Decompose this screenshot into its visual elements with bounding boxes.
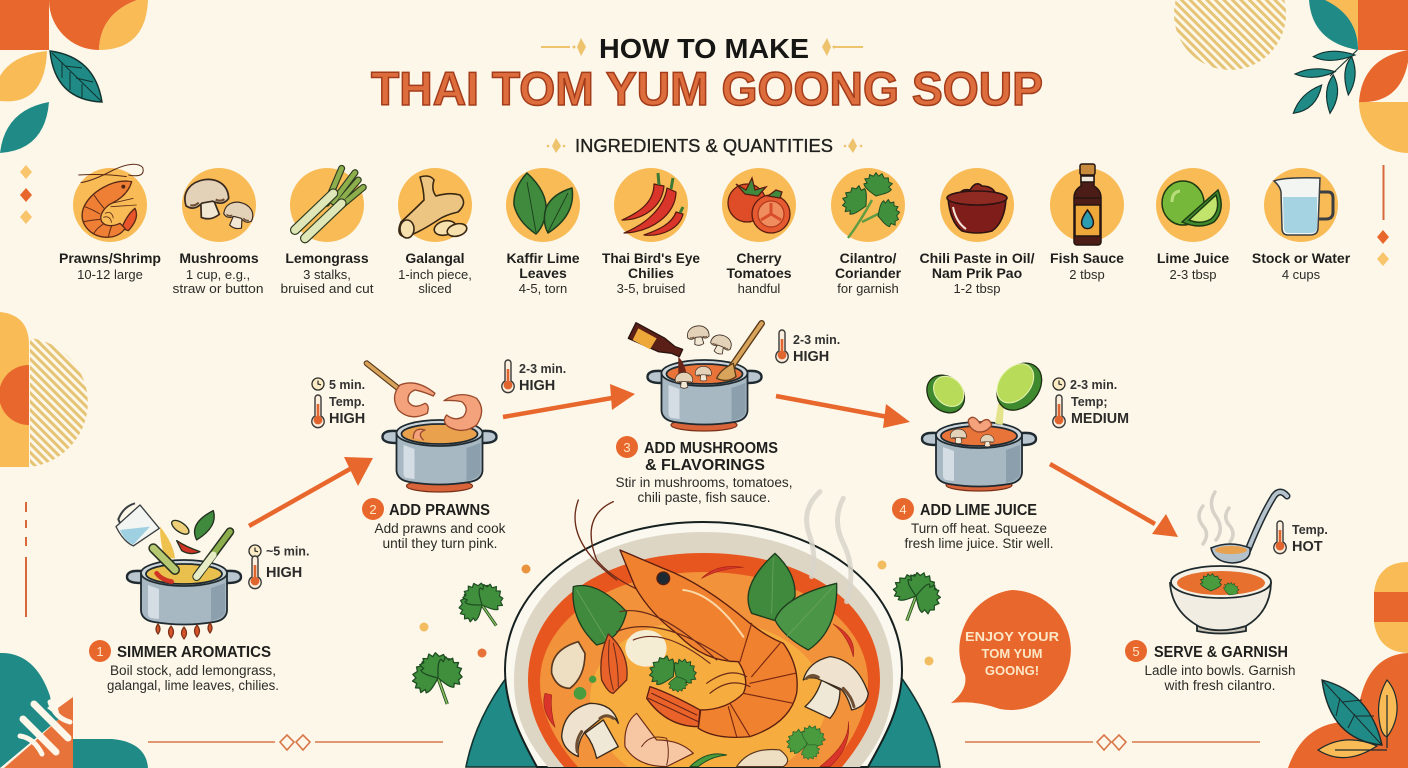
cilantro icon xyxy=(838,171,903,238)
ingredient labels: 1-inch piece, xyxy=(398,267,472,282)
fish ball xyxy=(625,630,667,667)
bottle icon xyxy=(1074,164,1101,245)
bottom mushroom slice xyxy=(737,749,788,767)
step 3 illustration xyxy=(628,323,762,431)
step 3 badge and title xyxy=(616,436,778,474)
step 5 temperature: HOT xyxy=(1292,539,1323,555)
section heading: ingredients: INGREDIENTS & QUANTITIES xyxy=(575,136,833,156)
decoration: bottom-left shapes xyxy=(0,653,148,768)
title ornament left xyxy=(541,38,586,56)
step 2 time and temperature: Temp. xyxy=(329,395,365,409)
chili pieces xyxy=(544,566,854,767)
ingredient labels: 2-3 tbsp xyxy=(1170,267,1216,282)
step 4 badge and title: 4 xyxy=(899,502,907,517)
step 4 description: fresh lime juice. Stir well. xyxy=(904,536,1054,551)
soup toppings, in zoomed coordinates xyxy=(544,492,868,767)
ingredient labels: Chili Paste in Oil/ xyxy=(920,250,1035,266)
step 2 badge and title xyxy=(362,498,490,520)
bottom divider right xyxy=(965,735,1260,750)
step 1 description: Boil stock, add lemongrass, xyxy=(110,663,276,678)
soup xyxy=(528,553,880,767)
scattered cilantro and dots xyxy=(403,560,951,712)
ingredient labels: Tomatoes xyxy=(726,265,792,281)
ingredient: lemongrass xyxy=(290,168,364,242)
ingredient: cilantro xyxy=(831,168,905,242)
bottom divider left xyxy=(148,735,443,750)
step 2 illustration xyxy=(367,363,496,492)
shrimp icon xyxy=(78,164,143,237)
ingredient labels: straw or button xyxy=(172,281,264,296)
step 3 time and temperature: HIGH xyxy=(793,349,829,365)
step 3 badge and title: & FLAVORINGS xyxy=(645,457,765,474)
arrow 1 xyxy=(249,457,373,526)
leaf right two xyxy=(775,583,837,650)
step 3 time and temperature xyxy=(776,330,840,365)
ingredient labels: bruised and cut xyxy=(280,281,374,296)
title ornament right xyxy=(822,38,863,56)
garnish xyxy=(1200,574,1241,598)
chili icons xyxy=(622,173,683,235)
pot 1 contents xyxy=(153,532,230,582)
ingredient labels: Kaffir Lime xyxy=(506,250,580,266)
ingredient: galangal xyxy=(398,168,472,242)
ingredient: fish sauce xyxy=(1050,164,1124,245)
tomato icons xyxy=(728,178,790,233)
mushroom side xyxy=(552,642,585,688)
step 4 time and temperature: 2-3 min. xyxy=(1070,378,1117,392)
plate under bowl xyxy=(466,660,940,767)
step 2 time and temperature: HIGH xyxy=(329,411,365,427)
step 5 description: with fresh cilantro. xyxy=(1163,678,1276,693)
bowl xyxy=(505,522,902,767)
step 3 time and temperature: 2-3 min. xyxy=(793,333,840,347)
step 2 time and temperature xyxy=(312,378,365,428)
arrow 4 xyxy=(1050,464,1178,537)
ingredient labels: Fish Sauce xyxy=(1050,250,1124,266)
ingredient labels: Lemongrass xyxy=(285,250,369,266)
step 1 illustration xyxy=(116,503,241,639)
step 1 description: galangal, lime leaves, chilies. xyxy=(107,678,279,693)
ingredient: kaffir lime leaves xyxy=(506,168,580,242)
ingredient labels: Stock or Water xyxy=(1252,250,1351,266)
cilantro lower right xyxy=(784,722,829,763)
step 1 badge and title: SIMMER AROMATICS xyxy=(117,644,271,661)
serving bowl xyxy=(1170,566,1271,634)
step 3 lead-in timing: 2-3 min. xyxy=(519,362,566,376)
step 1 description xyxy=(107,663,279,693)
step 5 badge and title: SERVE & GARNISH xyxy=(1154,644,1288,661)
ingredient: cherry tomatoes xyxy=(722,168,796,242)
paste bowl icon xyxy=(947,184,1007,233)
steam wisps xyxy=(807,492,851,602)
soup inner xyxy=(540,572,868,767)
pitcher icon xyxy=(1274,178,1333,235)
step 5 description: Ladle into bowls. Garnish xyxy=(1144,663,1296,678)
ingredient labels: Leaves xyxy=(519,265,567,281)
step 4 description xyxy=(904,521,1054,551)
ingredient labels: 10-12 large xyxy=(77,267,143,282)
ingredient labels: 1 cup, e.g., xyxy=(186,267,250,282)
steam xyxy=(1199,492,1233,544)
step 3 description: Stir in mushrooms, tomatoes, xyxy=(616,475,792,490)
bowl inner rim xyxy=(514,532,893,767)
decoration: top-right shapes xyxy=(1174,0,1408,153)
mushroom icons xyxy=(182,176,256,232)
tail fan left xyxy=(601,634,627,693)
speech bubble: GOONG! xyxy=(985,663,1039,678)
title line two: THAI TOM YUM GOONG SOUP xyxy=(371,62,1043,115)
leaf right one xyxy=(748,553,795,622)
step 5 temperature: Temp. xyxy=(1292,523,1328,537)
step 2 description: Add prawns and cook xyxy=(374,521,506,536)
bottle, mushrooms and spoon xyxy=(628,323,762,388)
second prawn xyxy=(625,713,693,767)
decoration: right rule and diamonds xyxy=(1377,165,1389,266)
ingredient labels xyxy=(59,250,1351,296)
right mushroom xyxy=(803,657,868,718)
bottom mushroom xyxy=(562,703,618,758)
ingredient labels: Cherry xyxy=(736,250,782,266)
ingredient labels: Galangal xyxy=(405,250,465,266)
ingredient labels: Cilantro/ xyxy=(840,250,896,266)
burner flames xyxy=(156,623,212,639)
ingredient labels: handful xyxy=(738,281,780,296)
ladle xyxy=(1211,492,1287,563)
speech bubble: ENJOY YOUR xyxy=(965,629,1060,644)
limes and contents xyxy=(919,354,1051,447)
galangal icon xyxy=(399,176,468,238)
ingredient: lime juice xyxy=(1156,168,1230,242)
ingredient labels: Lime Juice xyxy=(1157,250,1229,266)
ingredient labels: Chilies xyxy=(628,265,674,281)
step 3 badge and title: ADD MUSHROOMS xyxy=(644,440,778,457)
leaf left xyxy=(573,585,627,645)
ingredient labels: for garnish xyxy=(837,281,899,296)
step 2 description xyxy=(374,521,506,551)
ingredient labels: 4 cups xyxy=(1282,267,1321,282)
decoration: left diamonds xyxy=(20,165,32,224)
ingredient: prawns xyxy=(73,164,147,242)
ingredient: chilies xyxy=(614,168,688,242)
step 1 time and temperature: HIGH xyxy=(266,565,302,581)
ingredient labels: Thai Bird's Eye xyxy=(602,250,700,266)
step 3 badge and title: 3 xyxy=(623,440,631,455)
antennae xyxy=(575,500,647,593)
step 4 badge and title: ADD LIME JUICE xyxy=(920,502,1037,519)
ingredient labels: Nam Prik Pao xyxy=(932,265,1022,281)
ingredient labels: 1-2 tbsp xyxy=(954,281,1000,296)
ingredient labels: 4-5, torn xyxy=(519,281,567,296)
step 5 illustration xyxy=(1170,492,1287,634)
ingredient labels: Mushrooms xyxy=(179,250,259,266)
step 2 time and temperature: 5 min. xyxy=(329,378,365,392)
step 1 time and temperature xyxy=(249,544,309,589)
arrow 3 xyxy=(776,396,910,428)
step 3 lead-in timing: HIGH xyxy=(519,378,555,394)
lemongrass icon xyxy=(295,168,363,238)
step 4 badge and title xyxy=(892,498,1037,520)
ingredient: stock or water xyxy=(1264,168,1338,242)
ingredient: mushrooms xyxy=(182,168,256,242)
ingredient labels: 3-5, bruised xyxy=(617,281,685,296)
ingredient labels: 2 tbsp xyxy=(1069,267,1105,282)
giant prawn xyxy=(617,550,797,737)
step 3 description xyxy=(616,475,792,505)
decoration: mid-left shapes xyxy=(0,312,88,467)
step 5 temperature xyxy=(1274,521,1328,555)
decoration: top-left shapes xyxy=(0,0,148,153)
ingredient labels: 3 stalks, xyxy=(303,267,351,282)
prawns and spoon xyxy=(367,363,482,440)
step 5 description xyxy=(1144,663,1296,693)
cilantro center xyxy=(645,651,701,693)
ingredient labels: Prawns/Shrimp xyxy=(59,250,161,266)
step 5 badge and title: 5 xyxy=(1132,644,1140,659)
ingredient: chili paste xyxy=(940,168,1014,242)
step 4 illustration xyxy=(919,354,1051,491)
speech bubble: TOM YUM xyxy=(982,646,1042,661)
falling aromatics xyxy=(116,503,214,558)
step 1 badge and title xyxy=(89,640,271,662)
decoration: left dashes xyxy=(25,502,27,617)
step 5 badge and title xyxy=(1125,640,1288,662)
step 2 badge and title: ADD PRAWNS xyxy=(389,502,490,519)
sprig xyxy=(1293,50,1357,113)
leaf icons xyxy=(514,173,572,234)
soup bowl hero xyxy=(505,492,902,767)
step 4 description: Turn off heat. Squeeze xyxy=(911,521,1047,536)
step 4 time and temperature xyxy=(1053,378,1129,428)
ingredient labels: sliced xyxy=(418,281,452,296)
lime icon xyxy=(1162,181,1221,226)
step 2 description: until they turn pink. xyxy=(382,536,498,551)
ingredient labels: Coriander xyxy=(835,265,902,281)
step 2 badge and title: 2 xyxy=(369,502,377,517)
title line one: HOW TO MAKE xyxy=(599,33,809,64)
speech bubble xyxy=(951,590,1071,710)
step 1 badge and title: 1 xyxy=(96,644,104,659)
step 1 time and temperature: ~5 min. xyxy=(266,544,309,558)
step 3 description: chili paste, fish sauce. xyxy=(638,490,770,505)
decoration: bottom-right shapes xyxy=(1288,562,1408,768)
arrow 2 xyxy=(503,384,635,417)
step 3 lead-in timing xyxy=(502,360,566,394)
step 4 time and temperature: MEDIUM xyxy=(1071,411,1129,427)
step 4 time and temperature: Temp; xyxy=(1071,395,1108,409)
